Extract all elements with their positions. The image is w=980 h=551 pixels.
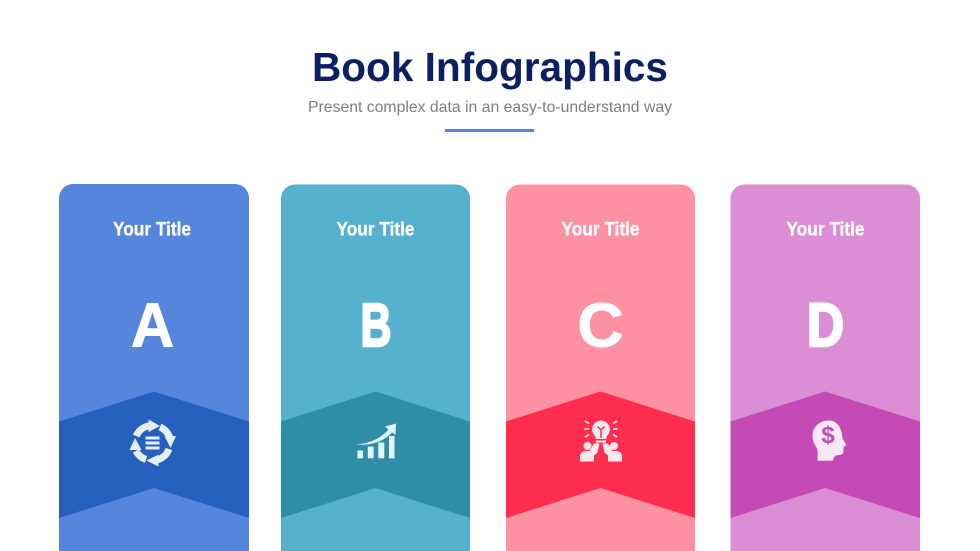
chevron band B [281,392,470,518]
letter A: A [131,292,174,360]
panel: A [59,184,249,551]
card background B [281,184,470,551]
card background D [730,184,920,551]
card title D: Your Title [786,218,865,240]
chevron band C [506,392,695,518]
title: Book Infographics [312,44,668,90]
icon: head with dollar sign: $ [821,422,835,449]
panel: B [281,184,470,551]
icon: rising bar chart [356,424,396,458]
chevron band A [59,392,249,518]
letter C: C [578,292,624,360]
icon: cycle with list [130,420,176,466]
card title C: Your Title [562,218,640,240]
chevron band D [730,392,920,518]
panel: C [506,184,695,551]
icon: head with dollar sign [812,420,846,461]
card background A [59,184,249,551]
icon: people holding light bulb [580,420,622,462]
card title A: Your Title [113,218,191,240]
panel: D [730,184,920,551]
subtitle: Present complex data in an easy-to-understand way [308,99,672,116]
card title B: Your Title [336,218,415,240]
letter B: B [360,291,392,359]
card background C [506,184,695,551]
title underline [445,129,534,132]
letter D: D [807,291,844,359]
